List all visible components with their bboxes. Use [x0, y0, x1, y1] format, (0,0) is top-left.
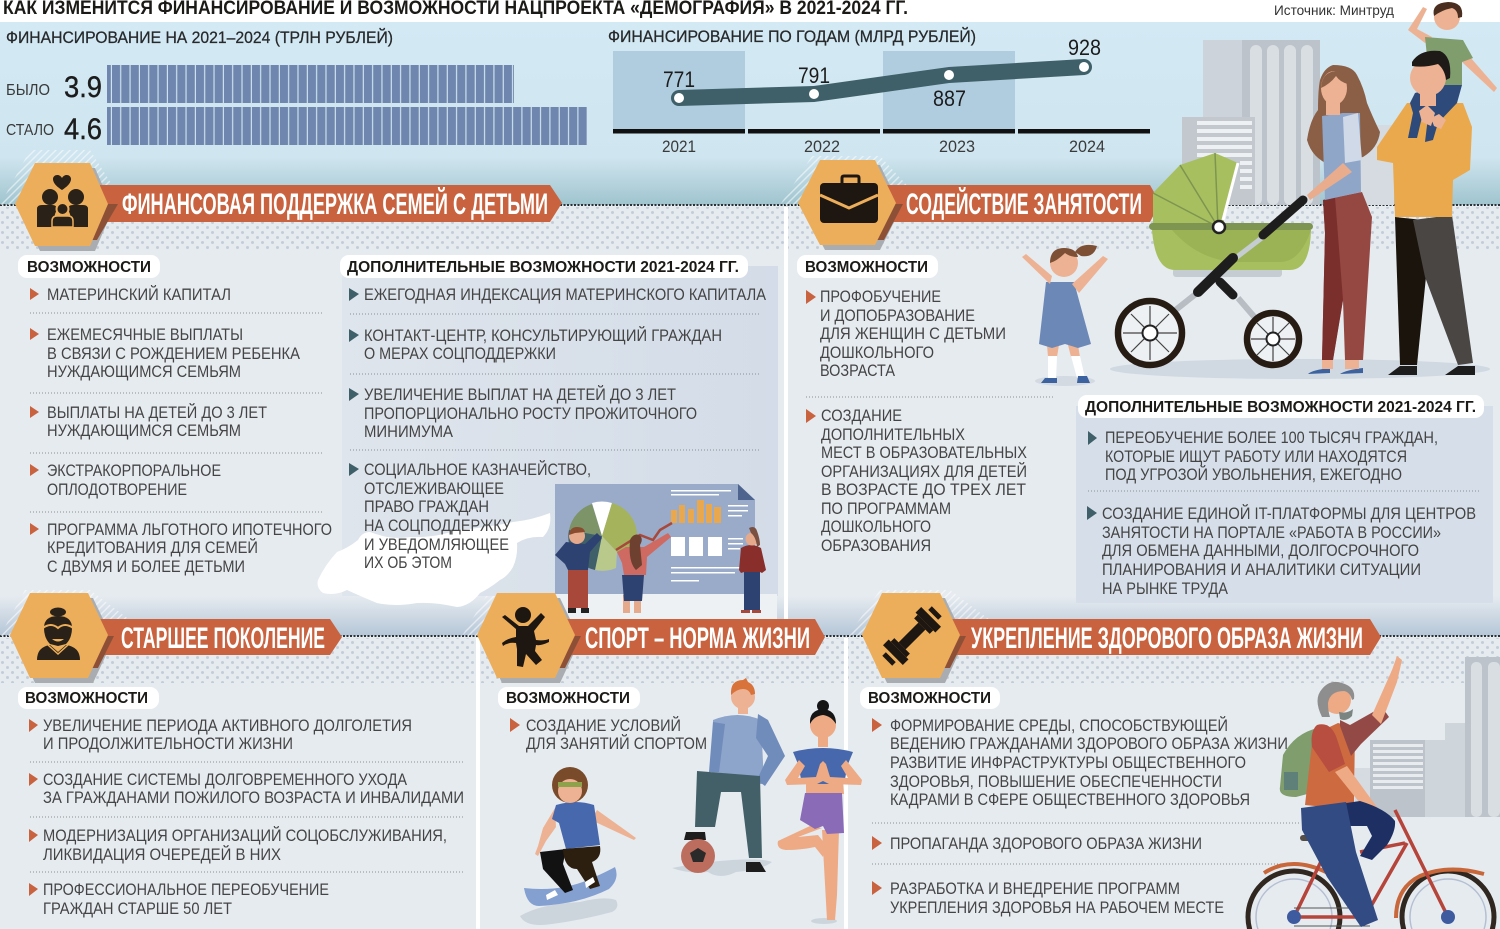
section banner: employment [798, 160, 1160, 250]
item: IVF: ЭКСТРАКОРПОРАЛЬНОЕ [47, 462, 221, 480]
section banner: older generation: СТАРШЕЕ ПОКОЛЕНИЕ [121, 622, 325, 655]
panel: healthy lifestyle [860, 593, 1381, 917]
item: contact centre: О МЕРАХ СОЦПОДДЕРЖКИ [364, 345, 556, 363]
illustration: city buildings [1182, 40, 1394, 205]
item: contact centre [349, 326, 722, 363]
item: nursery places [806, 407, 1027, 555]
panel: older generation [10, 593, 465, 918]
chip: opportunities: ВОЗМОЖНОСТИ [868, 690, 991, 707]
item: IT platform: ПЛАНИРОВАНИЯ И АНАЛИТИКИ СИТУАЦИИ [1102, 561, 1421, 579]
item: retraining over 50: ГРАЖДАН СТАРШЕ 50 ЛЕТ [43, 900, 232, 918]
icon: running figure [502, 607, 549, 667]
item: training: И ДОПОБРАЗОВАНИЕ [820, 307, 975, 325]
item: mortgage: КРЕДИТОВАНИЯ ДЛЯ СЕМЕЙ [47, 538, 258, 557]
item: maternity capital: МАТЕРИНСКИЙ КАПИТАЛ [47, 285, 231, 304]
item: workplace programs: РАЗРАБОТКА И ВНЕДРЕНИЕ ПРОГРАММ [890, 880, 1180, 898]
item: monthly payments: В СВЯЗИ С РОЖДЕНИЕМ РЕБЕНКА [47, 345, 300, 363]
item: nursery places: ДОШКОЛЬНОГО [821, 518, 931, 536]
chip: opportunities: ВОЗМОЖНОСТИ [506, 690, 630, 707]
item: monthly payments [30, 326, 300, 381]
illustration: yoga woman [778, 700, 862, 924]
item: contact centre: КОНТАКТ-ЦЕНТР, КОНСУЛЬТИРУЮЩИЙ ГРАЖДАН [364, 326, 722, 345]
chip: opportunities: ВОЗМОЖНОСТИ [27, 259, 151, 276]
chip: opportunities: ВОЗМОЖНОСТИ [805, 259, 928, 276]
item: long-term care [29, 771, 464, 807]
item: retraining: ПОД УГРОЗОЙ УВОЛЬНЕНИЯ, ЕЖЕГОДНО [1105, 465, 1402, 484]
item: environment: КАДРАМИ В СФЕРЕ ОБЩЕСТВЕННОГО ЗДОРОВЬЯ [890, 791, 1250, 809]
icon: dumbbell [877, 601, 947, 671]
item: social treasury: СОЦИАЛЬНОЕ КАЗНАЧЕЙСТВО, [364, 460, 591, 479]
item: workplace programs: УКРЕПЛЕНИЯ ЗДОРОВЬЯ НА РАБОЧЕМ МЕСТЕ [890, 899, 1224, 917]
chip: additional opportunities: ДОПОЛНИТЕЛЬНЫЕ ВОЗМОЖНОСТИ 2021-2024 ГГ. [347, 259, 739, 276]
item: retraining: КОТОРЫЕ ИЩУТ РАБОТУ ИЛИ НАХОДЯТСЯ [1105, 448, 1407, 466]
chip: opportunities: ВОЗМОЖНОСТИ [25, 690, 148, 707]
item: nursery places: В ВОЗРАСТЕ ДО ТРЕХ ЛЕТ [821, 481, 1026, 499]
item: nursery places: ПО ПРОГРАММАМ [821, 500, 951, 518]
values: 887 [933, 86, 966, 111]
item: nursery places: ОРГАНИЗАЦИЯХ ДЛЯ ДЕТЕЙ [821, 462, 1027, 481]
item: environment: ВЕДЕНИЮ ГРАЖДАНАМИ ЗДОРОВОГО ОБРАЗА ЖИЗНИ [890, 735, 1288, 753]
child on shoulders [1408, 2, 1497, 142]
item: environment: ЗДОРОВЬЯ, ПОВЫШЕНИЕ ОБЕСПЕЧЕННОСТИ [890, 773, 1222, 791]
item: IT platform [1087, 504, 1476, 598]
item: long-term care: СОЗДАНИЕ СИСТЕМЫ ДОЛГОВРЕМЕННОГО УХОДА [43, 771, 407, 789]
section banner: family support [15, 163, 562, 251]
chart: total financing bars [6, 28, 587, 146]
father head [1410, 51, 1450, 129]
section banner: sport: СПОРТ – НОРМА ЖИЗНИ [585, 622, 810, 655]
person: woman standing [739, 527, 766, 613]
year axis labels: 2024 [1069, 138, 1105, 156]
values: 791 [798, 63, 830, 88]
item: social treasury [349, 460, 591, 572]
item: social treasury: ОТСЛЕЖИВАЮЩЕЕ [364, 480, 504, 498]
hatching behind hexagons [0, 150, 990, 636]
trend line [674, 62, 1089, 103]
person: man with marker [555, 527, 602, 613]
item: payment increase: ПРОПОРЦИОНАЛЬНО РОСТУ ПРОЖИТОЧНОГО [364, 405, 697, 423]
item: monthly payments: НУЖДАЮЩИМСЯ СЕМЬЯМ [47, 363, 241, 381]
item: nursery places: ДОПОЛНИТЕЛЬНЫХ [821, 426, 965, 444]
mother [1307, 65, 1380, 374]
value: 4.6: 4.6 [64, 113, 102, 146]
values: 771 [663, 67, 695, 92]
person: woman pointing [617, 533, 671, 613]
chart heading: ФИНАНСИРОВАНИЕ НА 2021–2024 (ТРЛН РУБЛЕЙ) [6, 28, 393, 47]
item: mortgage: ПРОГРАММА ЛЬГОТНОГО ИПОТЕЧНОГО [47, 521, 332, 539]
chart heading: ФИНАНСИРОВАНИЕ ПО ГОДАМ (МЛРД РУБЛЕЙ) [608, 27, 976, 46]
bars on board [671, 500, 721, 523]
item: environment [872, 716, 1288, 809]
item: IVF [30, 462, 221, 499]
item: training: ВОЗРАСТА [820, 362, 895, 380]
item: modernisation: МОДЕРНИЗАЦИЯ ОРГАНИЗАЦИЙ СОЦОБСЛУЖИВАНИЯ, [43, 826, 447, 845]
item: environment: ФОРМИРОВАНИЕ СРЕДЫ, СПОСОБСТВУЮЩЕЙ [890, 716, 1228, 735]
icon: briefcase [820, 176, 878, 223]
source: Источник: Минтруд [1274, 2, 1394, 18]
wheel: left [1118, 301, 1182, 365]
item: social treasury: ПРАВО ГРАЖДАН [364, 498, 489, 516]
item: social treasury: ИХ ОБ ЭТОМ [364, 554, 452, 572]
item: mortgage [30, 521, 332, 576]
illustration: girl [1022, 245, 1108, 386]
item: promotion: ПРОПАГАНДА ЗДОРОВОГО ОБРАЗА ЖИЗНИ [890, 835, 1202, 853]
section banner: healthy lifestyle [862, 593, 1381, 683]
item: sports conditions [510, 716, 707, 753]
item: under 3 payments: НУЖДАЮЩИМСЯ СЕМЬЯМ [47, 422, 241, 440]
bicycle [1248, 810, 1494, 929]
year axis labels: 2021 [662, 138, 696, 156]
father body [1377, 103, 1475, 375]
section banner: employment: СОДЕЙСТВИЕ ЗАНЯТОСТИ [906, 187, 1142, 221]
item: nursery places: СОЗДАНИЕ [821, 407, 902, 425]
section banner: family support: ФИНАНСОВАЯ ПОДДЕРЖКА СЕМЕЙ С ДЕТЬМИ [122, 187, 548, 221]
stroller [1118, 153, 1313, 365]
item: active longevity: УВЕЛИЧЕНИЕ ПЕРИОДА АКТИВНОГО ДОЛГОЛЕТИЯ [43, 717, 412, 735]
item: nursery places: ОБРАЗОВАНИЯ [821, 537, 931, 555]
item: retraining over 50 [29, 881, 329, 918]
illustration: family with stroller [1110, 2, 1497, 379]
illustration: presentation [555, 484, 777, 619]
item: social treasury: И УВЕДОМЛЯЮЩЕЕ [364, 536, 509, 554]
map of Russia [318, 513, 550, 607]
illustration: buildings behind cyclist [1355, 657, 1500, 817]
rider [1301, 656, 1402, 927]
backpack [1280, 728, 1330, 797]
illustration: skateboarder [520, 767, 636, 925]
item: modernisation [29, 826, 447, 864]
item: IT platform: НА РЫНКЕ ТРУДА [1102, 580, 1228, 598]
values: 928 [1068, 35, 1101, 60]
additional panel background: employment [1076, 406, 1493, 603]
item: retraining [1088, 429, 1438, 484]
chip: additional opportunities: ДОПОЛНИТЕЛЬНЫЕ ВОЗМОЖНОСТИ 2021-2024 ГГ. [1085, 399, 1476, 416]
item: social treasury: НА СОЦПОДДЕРЖКУ [364, 517, 511, 535]
section banner: sport [477, 593, 825, 683]
item: nursery places: МЕСТ В ОБРАЗОВАТЕЛЬНЫХ [821, 444, 1027, 462]
item: payment increase: МИНИМУМА [364, 423, 453, 441]
value: 3.9: 3.9 [64, 71, 102, 104]
icon: elderly woman [37, 608, 80, 660]
item: under 3 payments [30, 403, 267, 440]
item: IVF: ОПЛОДОТВОРЕНИЕ [47, 481, 187, 499]
chip: opportunities [18, 255, 160, 278]
item: active longevity [29, 717, 412, 753]
bar: 3.9 [107, 65, 514, 103]
item: long-term care: ЗА ГРАЖДАНАМИ ПОЖИЛОГО ВОЗРАСТА И ИНВАЛИДАМИ [43, 789, 464, 807]
item: environment: РАЗВИТИЕ ИНФРАСТРУКТУРЫ ОБЩЕСТВЕННОГО [890, 754, 1246, 772]
year axis labels [662, 138, 1105, 156]
year axis labels: 2023 [939, 138, 975, 156]
item: modernisation: ЛИКВИДАЦИЯ ОЧЕРЕДЕЙ В НИХ [43, 845, 281, 864]
item: sports conditions: СОЗДАНИЕ УСЛОВИЙ [526, 716, 681, 735]
item: retraining: ПЕРЕОБУЧЕНИЕ БОЛЕЕ 100 ТЫСЯЧ ГРАЖДАН, [1105, 429, 1438, 447]
item: under 3 payments: ВЫПЛАТЫ НА ДЕТЕЙ ДО 3 ЛЕТ [47, 403, 267, 422]
chart: financing by year [608, 27, 1150, 156]
values [663, 35, 1101, 111]
item: training [806, 288, 1006, 380]
item: payment increase: УВЕЛИЧЕНИЕ ВЫПЛАТ НА ДЕТЕЙ ДО 3 ЛЕТ [364, 385, 676, 404]
illustration: man with ball [672, 678, 785, 876]
item: sports conditions: ДЛЯ ЗАНЯТИЙ СПОРТОМ [526, 734, 707, 753]
item: IT platform: ЗАНЯТОСТИ НА ПОРТАЛЕ «РАБОТА В РОССИИ» [1102, 524, 1441, 542]
item: indexation: ЕЖЕГОДНАЯ ИНДЕКСАЦИЯ МАТЕРИНСКОГО КАПИТАЛА [364, 286, 766, 304]
panel: employment [797, 160, 1484, 598]
item: IT platform: ДЛЯ ОБМЕНА ДАННЫМИ, ДОЛГОСРОЧНОГО [1102, 542, 1419, 560]
item: training: ПРОФОБУЧЕНИЕ [820, 288, 941, 306]
item: monthly payments: ЕЖЕМЕСЯЧНЫЕ ВЫПЛАТЫ [47, 326, 243, 344]
item: retraining over 50: ПРОФЕССИОНАЛЬНОЕ ПЕРЕОБУЧЕНИЕ [43, 881, 329, 899]
panel: sport [477, 593, 862, 925]
shadow [1110, 359, 1490, 379]
list: opportunities [30, 285, 332, 576]
illustration: cyclist [1248, 656, 1494, 929]
bar: 4.6 [107, 107, 587, 145]
item: active longevity: И ПРОДОЛЖИТЕЛЬНОСТИ ЖИЗНИ [43, 735, 293, 753]
item: workplace programs [872, 880, 1224, 917]
item: payment increase [349, 385, 697, 441]
item: mortgage: С ДВУМЯ И БОЛЕЕ ДЕТЬМИ [47, 558, 245, 576]
pie chart [568, 501, 637, 571]
label: was: БЫЛО [6, 82, 50, 99]
item: training: ДОШКОЛЬНОГО [820, 344, 934, 362]
item: training: ДЛЯ ЖЕНЩИН С ДЕТЬМИ [820, 325, 1006, 343]
section banner: older generation [10, 593, 342, 683]
label: now: СТАЛО [6, 122, 54, 139]
icon: family [37, 175, 88, 227]
list: additional opportunities [349, 286, 766, 572]
additional panel background: family support [342, 266, 778, 596]
chip: opportunities [797, 255, 938, 278]
year axis labels: 2022 [804, 138, 840, 156]
panel: family support [15, 163, 766, 576]
wheel: right [1247, 313, 1299, 365]
